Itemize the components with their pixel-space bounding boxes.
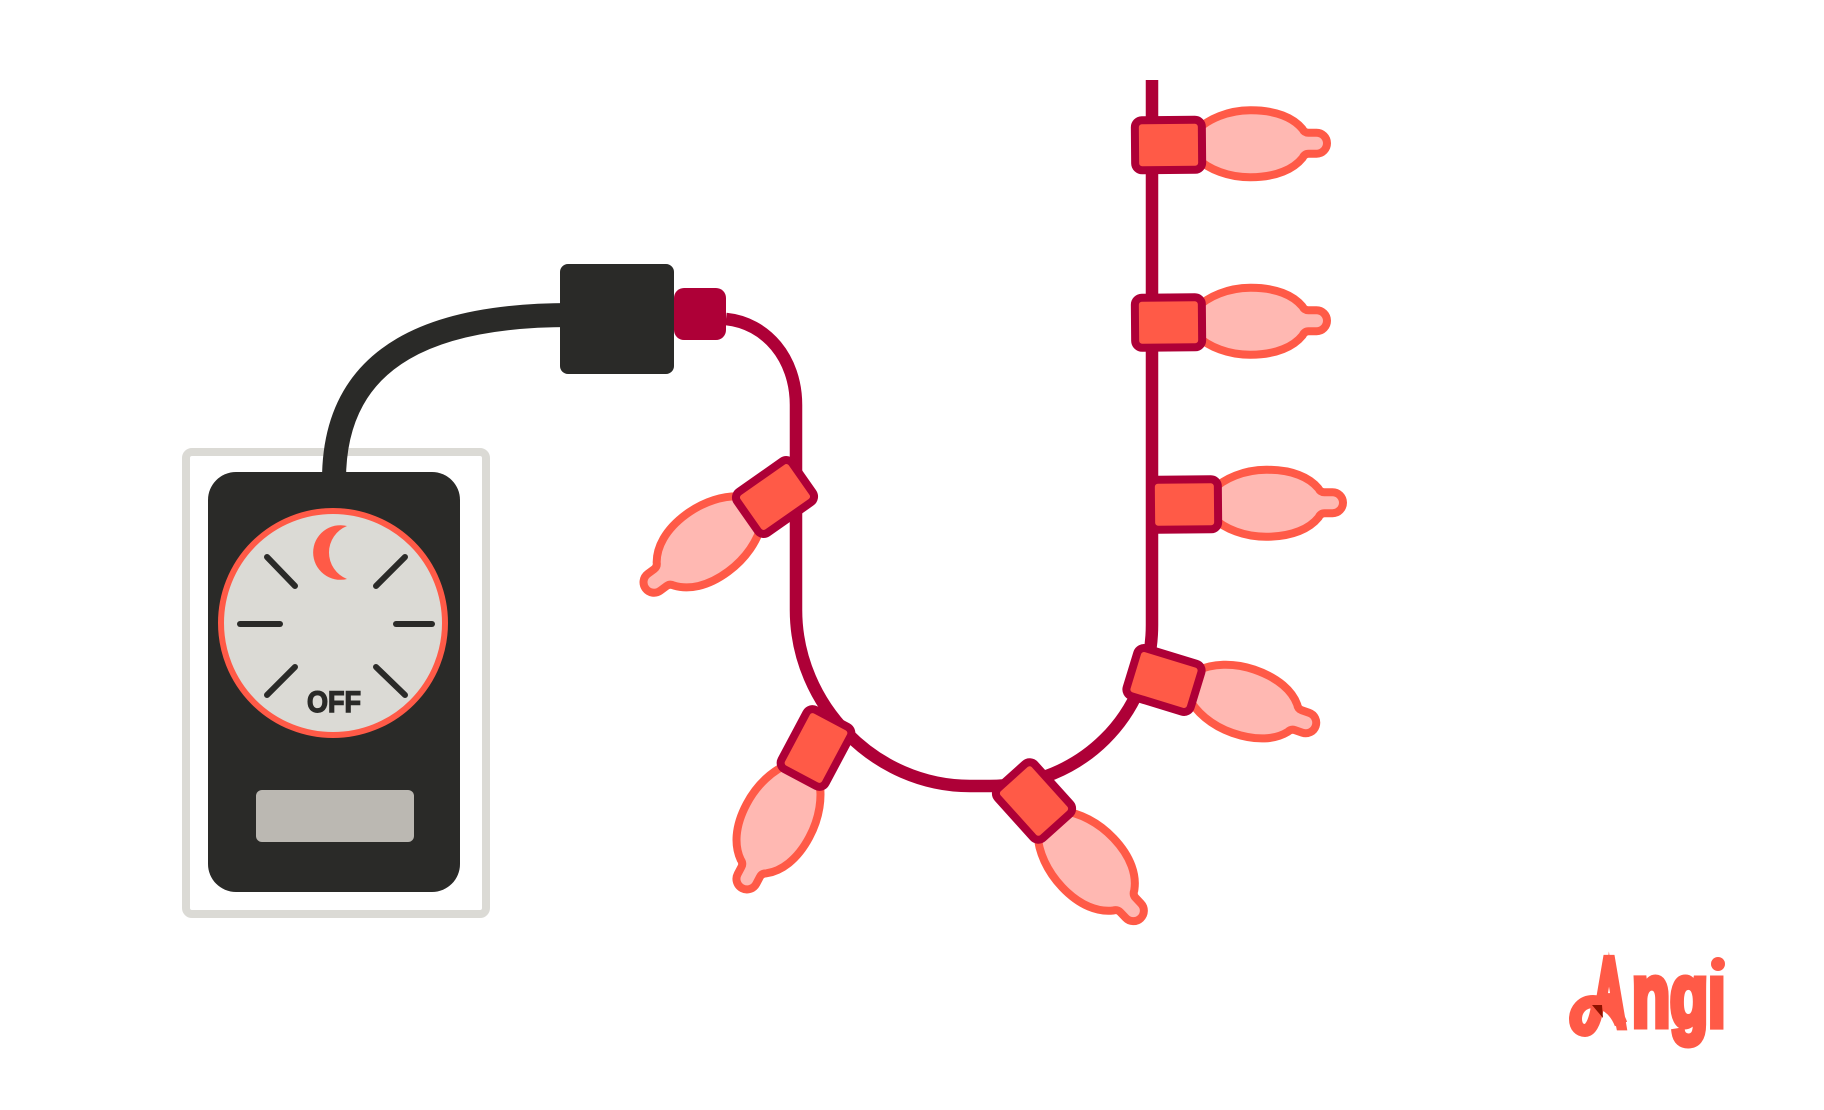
dial label: OFF: OFF xyxy=(307,686,361,719)
logo: Angi: A xyxy=(1593,939,1625,1046)
outlet plate xyxy=(186,452,486,914)
icon: crescent moon xyxy=(313,525,347,580)
timer body xyxy=(208,472,460,892)
dial face xyxy=(221,511,445,735)
timer button xyxy=(256,790,414,842)
logo: Angi xyxy=(1576,939,1730,1046)
light bulb 5 xyxy=(983,752,1168,945)
light bulb 1 xyxy=(1135,110,1327,178)
dial tick marks xyxy=(240,557,432,695)
light bulb 3 xyxy=(1151,469,1343,538)
light bulb 4 xyxy=(1122,634,1328,759)
light bulb 7 xyxy=(622,446,823,618)
light bulb 6 xyxy=(711,702,864,905)
black power cord xyxy=(334,315,570,480)
light bulb 2 xyxy=(1135,287,1327,356)
logo: Angi: ngi xyxy=(1632,946,1725,1046)
red light-string wire xyxy=(726,80,1152,786)
timer dial xyxy=(221,511,445,735)
red plug xyxy=(674,288,726,340)
black plug box xyxy=(560,264,674,374)
